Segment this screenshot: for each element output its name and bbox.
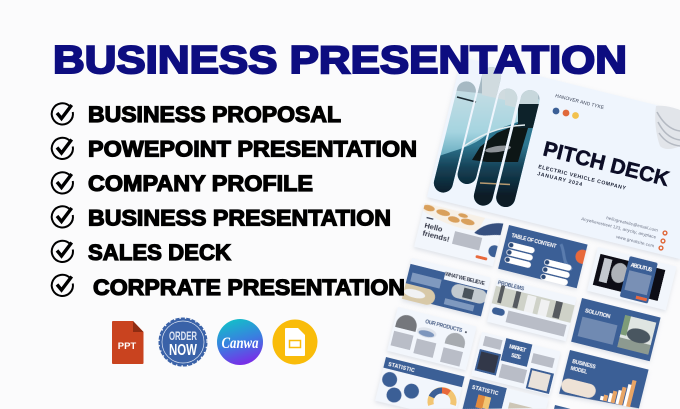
slide: statistic bars <box>463 379 549 409</box>
slide subtitle: ELECTRIC VEHICLE COMPANY <box>538 164 627 192</box>
slide: problems <box>487 278 577 341</box>
slide: market size <box>471 332 561 395</box>
icon: ppt file: PPT <box>118 341 136 352</box>
contact details: www.greatsite.com <box>616 234 655 248</box>
icon: canva <box>217 319 263 365</box>
slide: hello friends: Hello <box>424 221 444 234</box>
slide: table of content <box>498 225 592 289</box>
slide: statistic circles <box>375 357 465 409</box>
item: company profile: COMPANY PROFILE <box>88 171 313 196</box>
slide: market size: SIZE <box>510 353 522 361</box>
abstract mesh wave <box>655 106 680 149</box>
item: business presentation: BUSINESS PRESENTATION <box>88 206 391 230</box>
slide: statistic circles: STATISTIC <box>387 362 415 374</box>
slide: solution <box>571 298 661 361</box>
contact icons <box>659 231 667 250</box>
contact details <box>581 215 659 248</box>
contact details: hellogreatsite@email.com <box>606 215 659 233</box>
slide: cropped bottom slide <box>554 405 571 409</box>
slide: about us <box>587 247 677 310</box>
slide title: PITCH DECK <box>541 138 672 191</box>
contact details: Anywherestreet 123, anycity, anyplace <box>581 216 657 240</box>
donut chart <box>431 390 454 405</box>
item: corporate presentation: CORPRATE PRESENTATION <box>93 275 405 300</box>
car photo strips <box>434 67 540 207</box>
item: sales deck: SALES DECK <box>88 240 231 265</box>
slide: market size: MARKET <box>508 344 526 354</box>
slide: our products <box>387 307 477 370</box>
icon: ppt file <box>112 321 144 364</box>
slide: business model: MODEL <box>570 366 588 376</box>
slide: what we believe <box>399 257 492 319</box>
icon: order now badge <box>159 318 207 366</box>
slide: business model <box>559 350 649 409</box>
slide: table of content: TABLE OF CONTENT <box>511 233 557 250</box>
brand name: HANOVER AND TYKE <box>555 93 604 111</box>
item: powerpoint presentation: POWEPOINT PRESENTATION <box>88 136 417 162</box>
slide collage <box>375 57 680 409</box>
icon: order now badge: NOW <box>169 342 198 359</box>
checklist <box>52 102 417 300</box>
icon: order now badge: ORDER <box>169 329 197 343</box>
icon: google slides <box>272 320 318 364</box>
slide: business model: BUSINESS <box>571 359 597 371</box>
slide: our products: OUR PRODUCTS <box>424 319 463 334</box>
item: business proposal: BUSINESS PROPOSAL <box>88 102 341 127</box>
slide: problems: PROBLEMS <box>497 280 525 293</box>
slide: solution: SOLUTION <box>584 308 611 320</box>
slide: main pitch deck cover <box>427 57 680 259</box>
brand colour dots <box>553 108 579 119</box>
icon: canva: Canwa <box>222 335 258 352</box>
slide: hello friends <box>413 203 507 267</box>
slide: what we believe: WHAT WE BELIEVE <box>444 272 486 287</box>
slide: statistic bars: STATISTIC <box>471 385 499 397</box>
slide: about us: ABOUT US <box>630 263 653 274</box>
slide date: JANUARY 2024 <box>537 171 583 188</box>
title: BUSINESS PRESENTATION <box>53 39 627 82</box>
slide: hello friends: friends! <box>422 228 451 244</box>
